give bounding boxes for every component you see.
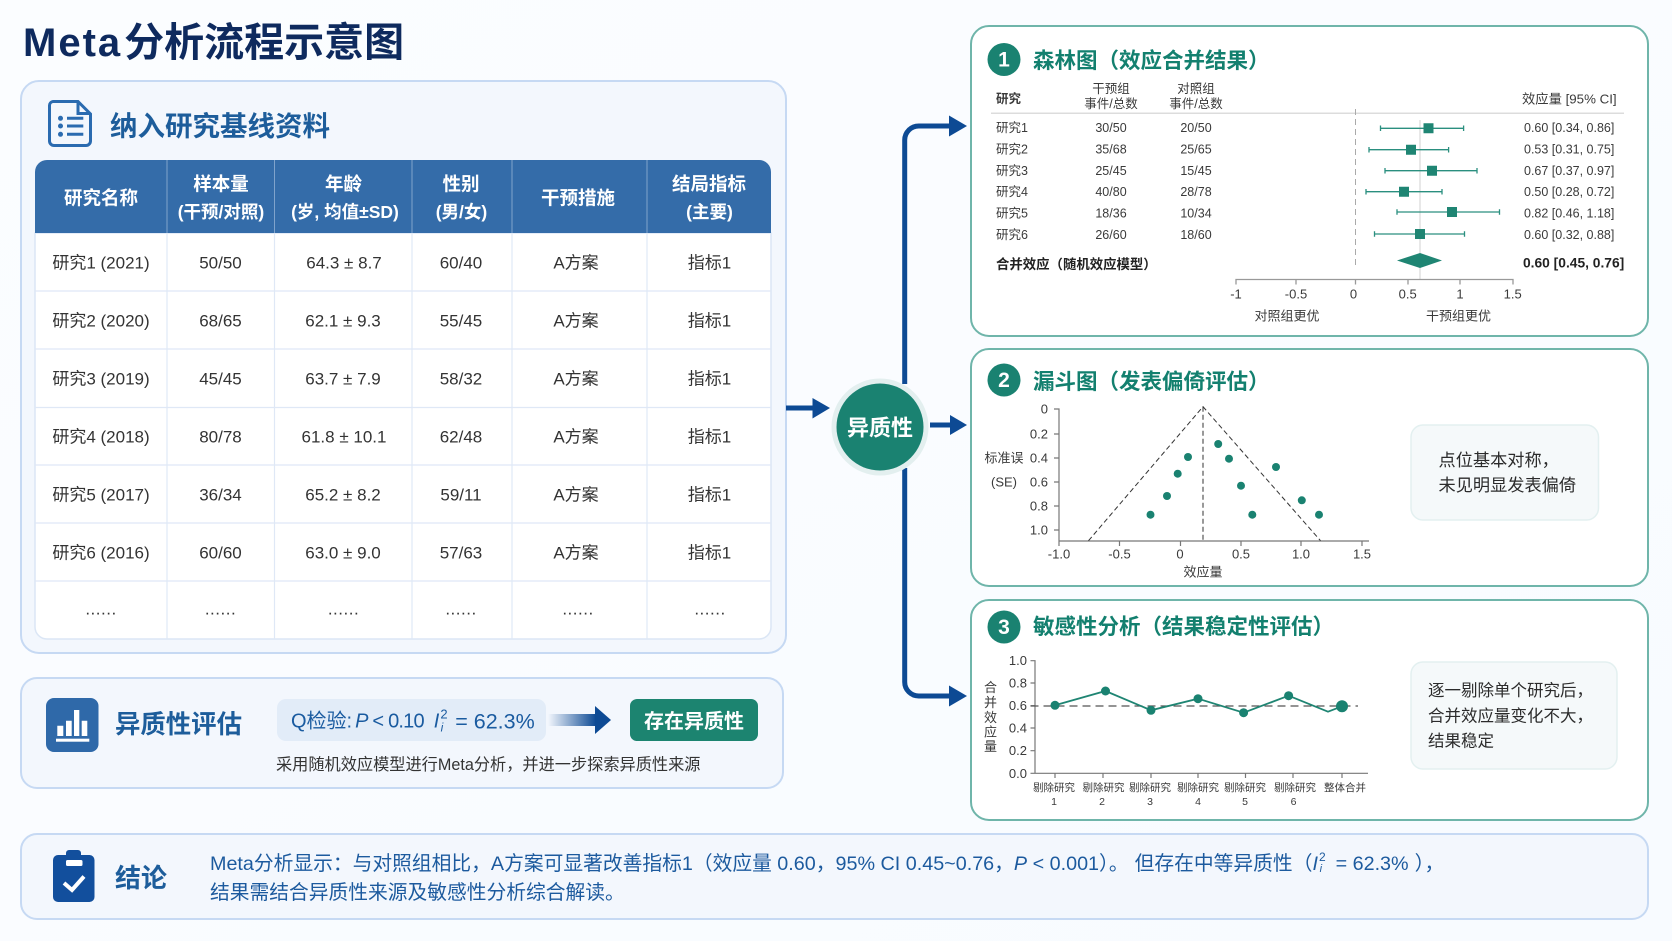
node: heterogeneity: 异质性: [847, 416, 913, 440]
table rows: 55/45: [440, 312, 482, 330]
table rows: 57/63: [440, 544, 482, 562]
arrow: branch to forest plot: [905, 116, 967, 384]
forest study rows: 研究6: [996, 227, 1028, 242]
heading: 敏感性分析（结果稳定性评估）: [1033, 614, 1334, 639]
table rows: A方案: [553, 486, 599, 504]
forest study rows: 30/50: [1095, 121, 1127, 135]
conclusion text: ），: [1415, 853, 1444, 875]
table rows: 62/48: [440, 428, 482, 446]
conclusion text: 2: [1319, 850, 1326, 864]
pooled effect row: 合并效应（随机效应模型）: [996, 256, 1157, 272]
arrow: to result: [548, 706, 611, 734]
table rows: 60/60: [199, 544, 242, 562]
forest table header: 事件/总数: [1084, 96, 1138, 111]
conclusion text: i: [1320, 863, 1323, 875]
panel: heterogeneity assessment: [21, 678, 783, 788]
funnel chart: 0.5: [1232, 546, 1250, 562]
funnel note: [1411, 425, 1598, 520]
funnel note: 点位基本对称，: [1438, 450, 1559, 470]
forest table header: 干预组: [1092, 82, 1130, 96]
forest study rows: 10/34: [1180, 206, 1212, 220]
funnel chart: 0: [1041, 402, 1048, 416]
table rows: 50/50: [199, 254, 242, 272]
sensitivity chart: 效: [984, 710, 997, 725]
forest study rows: 25/65: [1180, 142, 1212, 156]
table rows: A方案: [553, 370, 599, 388]
forest study rows: 研究4: [996, 184, 1028, 199]
table rows: 60/40: [440, 254, 482, 272]
icon: document list: [49, 102, 90, 146]
table header: 性别: [442, 174, 480, 194]
forest study rows: 40/80: [1095, 185, 1127, 199]
table rows: 指标1: [688, 486, 731, 504]
table rows: 指标1: [688, 370, 731, 388]
table header: (男/女): [436, 202, 487, 222]
forest plot chart: 1.5: [1504, 286, 1522, 302]
table header: 年龄: [325, 174, 362, 194]
table rows: 研究2 (2020): [52, 312, 150, 330]
table rows: [52, 254, 731, 618]
table rows: ......: [445, 600, 477, 618]
panel: funnel plot: [971, 349, 1648, 586]
sensitivity chart: 剔除研究: [1177, 781, 1219, 794]
funnel chart: -1.0: [1048, 546, 1070, 562]
sensitivity chart: 0.4: [1009, 720, 1027, 736]
table rows: 61.8 ± 10.1: [302, 428, 386, 446]
icon: bar chart: [46, 698, 98, 752]
forest study rows: 20/50: [1180, 121, 1212, 135]
forest study rows: 研究5: [996, 206, 1028, 220]
funnel chart: 效应量: [1183, 564, 1223, 580]
table header: (干预/对照): [178, 202, 264, 222]
table rows: A方案: [553, 254, 599, 272]
heading: 漏斗图（发表偏倚评估）: [1033, 370, 1270, 394]
funnel chart: 1.5: [1353, 546, 1371, 562]
funnel chart: 标准误: [984, 450, 1024, 466]
panel: forest plot: [971, 26, 1648, 336]
table rows: 研究3 (2019): [52, 370, 150, 388]
statistic pill: i: [441, 720, 444, 734]
sensitivity chart: 0.0: [1009, 766, 1027, 781]
funnel chart: (SE): [991, 474, 1017, 490]
table header: (主要): [686, 202, 733, 222]
forest plot chart: 对照组更优: [1254, 308, 1320, 324]
sensitivity chart: 1: [1051, 796, 1057, 808]
heading: 森林图（效应合并结果）: [1033, 48, 1270, 73]
table rows: 研究4 (2018): [52, 428, 150, 446]
sensitivity chart: 1.0: [1009, 653, 1027, 668]
sensitivity note: [1411, 662, 1617, 769]
sensitivity chart: 4: [1195, 796, 1201, 808]
heading: 纳入研究基线资料: [110, 110, 330, 142]
sensitivity chart: 0.6: [1009, 698, 1027, 713]
forest plot chart: 0: [1350, 286, 1357, 302]
icon: clipboard check: [53, 850, 94, 902]
forest study rows: 18/60: [1180, 228, 1212, 242]
forest study rows: 15/45: [1180, 164, 1212, 178]
table rows: 59/11: [440, 486, 482, 504]
badge 1: [988, 43, 1020, 76]
arrow: to funnel plot: [930, 415, 967, 435]
conclusion text: = 62.3%: [1330, 853, 1409, 875]
table rows: ......: [328, 600, 359, 618]
funnel chart: 0.4: [1030, 450, 1048, 466]
forest study rows: 0.60 [0.32, 0.88]: [1524, 228, 1614, 242]
forest study rows: 0.67 [0.37, 0.97]: [1524, 164, 1614, 178]
funnel chart: 0.8: [1030, 498, 1048, 514]
statistic pill: 2: [440, 706, 448, 721]
table rows: 63.0 ± 9.0: [305, 544, 381, 562]
table header: 研究名称: [64, 188, 138, 208]
sensitivity chart: 量: [984, 739, 997, 754]
forest table header: 研究: [996, 91, 1022, 106]
sensitivity chart: 5: [1242, 796, 1248, 808]
sensitivity chart: 0.8: [1009, 676, 1027, 690]
funnel chart: 0.2: [1030, 426, 1048, 442]
funnel chart: [984, 402, 1371, 580]
forest study rows: 26/60: [1095, 228, 1127, 242]
forest plot chart: -1: [1230, 286, 1242, 302]
statistic pill: = 62.3%: [449, 710, 535, 734]
badge 1: 1: [998, 48, 1010, 72]
badge 2: [988, 364, 1020, 396]
table rows: A方案: [553, 544, 599, 562]
funnel chart: 1.0: [1292, 546, 1310, 562]
pooled effect row: 0.60 [0.45, 0.76]: [1523, 256, 1624, 270]
table rows: 指标1: [688, 254, 731, 272]
sensitivity chart: 剔除研究: [1224, 781, 1266, 794]
table rows: 63.7 ± 7.9: [305, 370, 381, 388]
table header: 干预措施: [541, 188, 615, 208]
forest table header: 事件/总数: [1169, 96, 1223, 111]
sensitivity chart: 剔除研究: [1082, 781, 1125, 794]
table rows: ......: [562, 600, 594, 618]
sensitivity chart: 2: [1099, 796, 1105, 808]
table rows: 指标1: [688, 544, 731, 562]
table header: (岁, 均值±SD): [291, 202, 399, 222]
conclusion text: Meta分析显示：与对照组相比，A方案可显著改善指标1（效应量 0.60，95% CI 0.45~0.76，P < 0.001）。 但存在中等异质性（I: [210, 853, 1318, 875]
funnel chart: -0.5: [1108, 546, 1131, 562]
pooled effect row: [996, 256, 1624, 272]
table rows: 指标1: [688, 428, 731, 446]
funnel chart: 0: [1176, 546, 1184, 562]
table rows: 68/65: [199, 312, 242, 330]
forest study rows: 0.50 [0.28, 0.72]: [1524, 185, 1614, 199]
forest plot chart: 干预组更优: [1426, 308, 1491, 324]
sensitivity chart: 剔除研究: [1274, 781, 1316, 794]
table rows: 64.3 ± 8.7: [306, 254, 382, 272]
forest study rows: 0.53 [0.31, 0.75]: [1524, 142, 1614, 156]
forest study rows: 35/68: [1095, 142, 1127, 156]
forest plot chart: -0.5: [1285, 286, 1307, 302]
sensitivity chart: [984, 653, 1368, 808]
funnel chart: 0.6: [1030, 474, 1048, 490]
sensitivity chart: 应: [984, 724, 997, 740]
table rows: 58/32: [440, 370, 482, 388]
forest table header: 对照组: [1177, 82, 1215, 96]
table rows: 45/45: [199, 370, 242, 388]
table rows: 指标1: [688, 312, 731, 330]
sensitivity chart: 合: [984, 680, 997, 695]
sensitivity chart: 6: [1291, 796, 1297, 808]
badge: heterogeneity present: [630, 699, 758, 741]
forest study rows: [996, 120, 1614, 242]
forest table header: 效应量 [95% CI]: [1522, 92, 1617, 106]
forest plot chart: 1: [1456, 286, 1464, 302]
heading: 异质性评估: [115, 711, 242, 739]
sensitivity chart: 整体合并: [1324, 781, 1366, 794]
arrow: branch to sensitivity analysis: [905, 468, 967, 706]
forest study rows: 0.60 [0.34, 0.86]: [1524, 121, 1614, 135]
table rows: 65.2 ± 8.2: [305, 486, 381, 504]
node: heterogeneity: [832, 378, 928, 476]
forest study rows: 研究2: [996, 142, 1028, 156]
forest table header: [991, 82, 1624, 114]
conclusion text: [210, 850, 1444, 904]
forest study rows: 25/45: [1095, 164, 1127, 178]
badge 3: 3: [998, 616, 1010, 639]
badge: heterogeneity present: 存在异质性: [644, 710, 744, 733]
sensitivity chart: 0.2: [1009, 743, 1027, 758]
heading: 结论: [115, 863, 167, 893]
table rows: 研究6 (2016): [52, 544, 150, 562]
table rows: A方案: [553, 428, 599, 446]
arrow: table to heterogeneity: [786, 398, 830, 418]
table rows: 80/78: [199, 428, 242, 446]
panel: baseline table: [21, 81, 786, 653]
panel: conclusion: [21, 834, 1648, 919]
table rows: ......: [85, 600, 117, 618]
note: 采用随机效应模型进行Meta分析，并进一步探索异质性来源: [276, 755, 700, 774]
table rows: A方案: [553, 312, 599, 330]
title: Meta分析流程示意图: [23, 21, 404, 65]
forest study rows: 研究3: [996, 163, 1028, 178]
funnel chart: 1.0: [1030, 522, 1048, 538]
table rows: 研究1 (2021): [52, 254, 150, 272]
table rows: ......: [205, 600, 236, 618]
table header: 结局指标: [672, 174, 746, 194]
baseline table: [35, 160, 771, 639]
forest study rows: 28/78: [1180, 185, 1212, 199]
sensitivity chart: 剔除研究: [1129, 781, 1171, 794]
badge 3: [988, 610, 1020, 644]
table header: [64, 174, 746, 222]
sensitivity note: 结果稳定: [1428, 732, 1494, 750]
sensitivity note: 合并效应量变化不大，: [1428, 706, 1593, 726]
forest plot chart: 0.5: [1399, 286, 1417, 302]
forest plot chart: [1230, 109, 1522, 324]
forest study rows: 18/36: [1095, 206, 1127, 220]
forest study rows: 0.82 [0.46, 1.18]: [1524, 206, 1614, 220]
sensitivity chart: 并: [984, 695, 997, 710]
statistic pill: Q检验:P < 0.10 I: [291, 710, 439, 732]
table header: 样本量: [193, 174, 249, 194]
funnel note: 未见明显发表偏倚: [1438, 475, 1576, 495]
sensitivity chart: 3: [1147, 796, 1153, 808]
sensitivity chart: 剔除研究: [1033, 781, 1075, 794]
table rows: ......: [694, 600, 726, 618]
forest study rows: 研究1: [996, 120, 1028, 135]
sensitivity note: 逐一剔除单个研究后，: [1428, 681, 1593, 700]
table rows: 研究5 (2017): [52, 486, 150, 504]
table rows: 36/34: [199, 486, 242, 504]
panel: sensitivity analysis: [971, 600, 1648, 820]
statistic pill: [277, 699, 546, 741]
badge 2: 2: [998, 369, 1010, 392]
table rows: 62.1 ± 9.3: [305, 312, 381, 330]
conclusion text: 结果需结合异质性来源及敏感性分析综合解读。: [210, 882, 625, 904]
